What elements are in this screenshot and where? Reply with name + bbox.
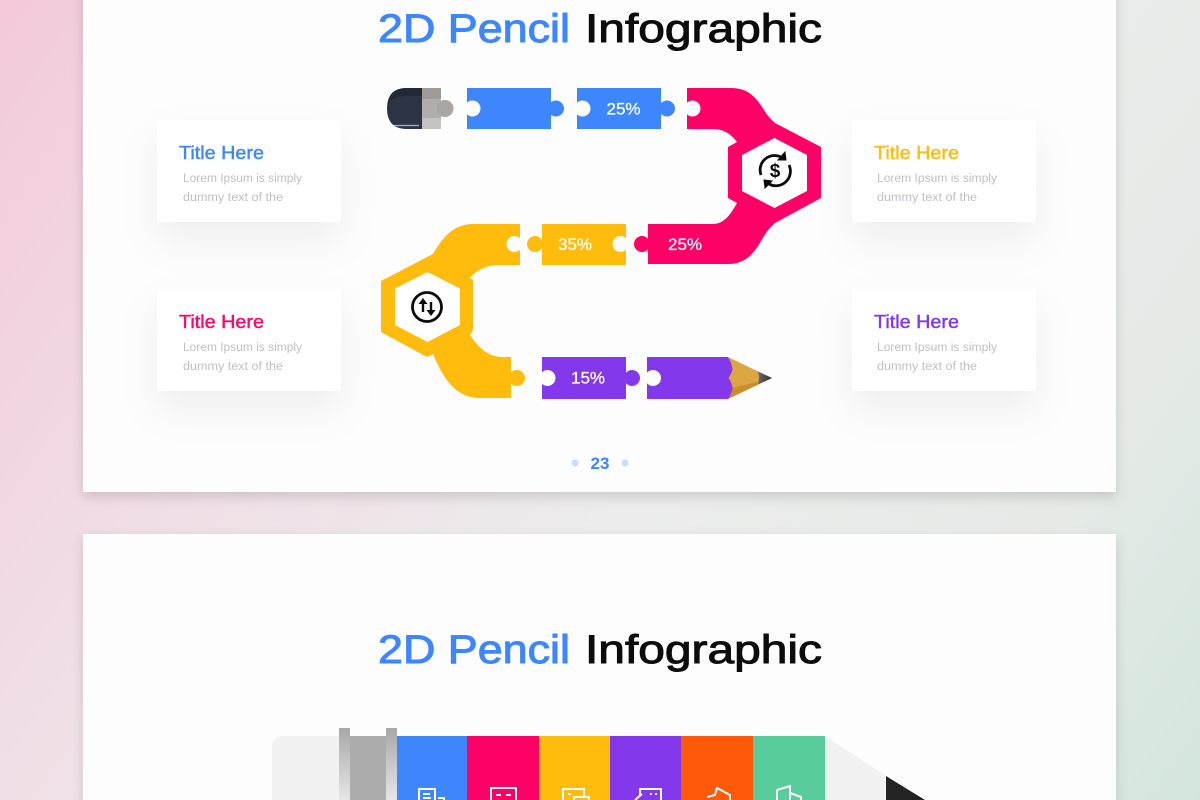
pencil eraser end: [272, 736, 340, 800]
blue band with icon: [397, 736, 467, 800]
card: pink title: Lorem Ipsum is simply: [183, 342, 302, 354]
pink band with icon: [467, 736, 539, 800]
panel: top slide: [83, 0, 1116, 492]
yellow band with icon: [539, 736, 610, 800]
icon: dollar exchange: $: [770, 161, 781, 182]
title: [378, 628, 822, 672]
purple puzzle segment with 15%: [540, 357, 640, 399]
pencil tip wood: [825, 736, 925, 800]
card: yellow title: Title Here: [874, 143, 959, 163]
pencil ferrule: [339, 728, 397, 800]
title: Infographic: [585, 628, 822, 672]
blue puzzle segment 2: 25%: [606, 100, 641, 118]
title: 2D Pencil: [378, 628, 570, 672]
yellow puzzle segment with 35%: 35%: [558, 235, 592, 254]
yellow puzzle segment with 35%: [527, 224, 628, 265]
card: blue title: [157, 120, 341, 222]
page number: [572, 454, 628, 473]
card: purple title: [852, 289, 1036, 391]
title: [378, 7, 822, 51]
pencil tip lead: [886, 776, 925, 800]
card: yellow title: [852, 120, 1036, 222]
card: pink title: Title Here: [179, 312, 264, 332]
orange band with icon: [681, 736, 753, 800]
purple puzzle segment with 15%: 15%: [571, 368, 605, 388]
card: yellow title: dummy text of the: [877, 192, 977, 204]
purple pencil tip segment: [645, 357, 772, 399]
pencil eraser piece: [387, 88, 454, 129]
green band with icon: [753, 736, 825, 800]
card: blue title: Title Here: [179, 143, 264, 163]
card: pink title: [157, 289, 341, 391]
pink hexagon connector: [634, 88, 821, 264]
card: pink title: dummy text of the: [183, 361, 283, 373]
card: purple title: Lorem Ipsum is simply: [877, 342, 997, 354]
card: blue title: dummy text of the: [183, 192, 283, 204]
card: purple title: dummy text of the: [877, 361, 977, 373]
yellow hexagon connector: [381, 224, 525, 398]
icon: up down arrows: [412, 292, 442, 322]
card: purple title: Title Here: [874, 312, 959, 332]
card: blue title: Lorem Ipsum is simply: [183, 173, 302, 185]
panel: bottom slide: [83, 534, 1116, 800]
card: yellow title: Lorem Ipsum is simply: [877, 173, 997, 185]
icon: dollar exchange: [760, 152, 790, 188]
purple band with icon: [610, 736, 681, 800]
pink hexagon connector: 25%: [668, 235, 702, 254]
blue puzzle segment 1: [464, 88, 564, 129]
title: Infographic: [585, 7, 822, 51]
page number: 23: [591, 454, 609, 473]
blue puzzle segment 2: [574, 88, 675, 129]
title: 2D Pencil: [378, 7, 570, 51]
